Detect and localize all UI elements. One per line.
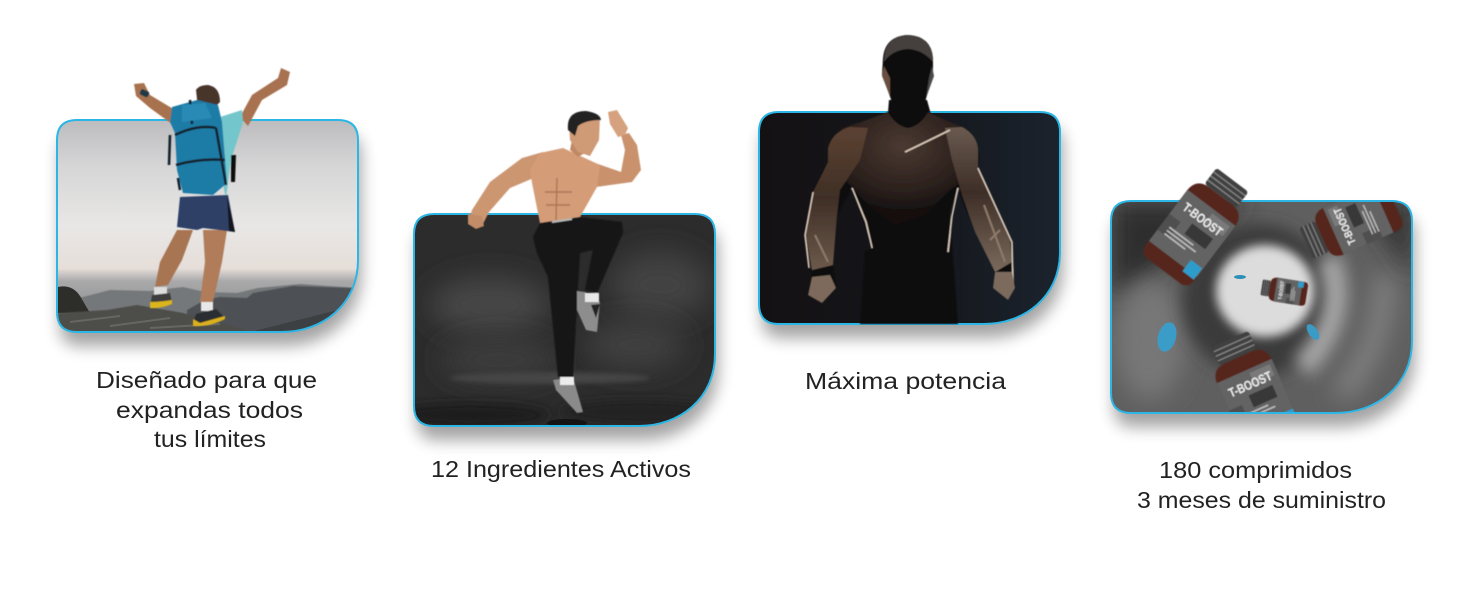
panel: hiker photo card	[57, 68, 361, 346]
card border	[414, 214, 715, 426]
card border	[1111, 201, 1412, 413]
caption: limits: Diseñado para que	[96, 367, 317, 393]
caption: limits: tus límites	[154, 426, 266, 452]
grey tunnel background	[1112, 202, 1411, 412]
caption: limits: expandas todos	[116, 397, 303, 423]
panel: muscular silhouette card	[759, 35, 1063, 338]
caption: potency: Máxima potencia	[805, 368, 1006, 394]
smoky dark background	[415, 215, 714, 425]
bottle: top right	[1300, 202, 1403, 258]
pill: tiny	[1234, 275, 1246, 279]
pill: small	[1304, 322, 1322, 342]
card border	[759, 112, 1060, 324]
hiker figure	[134, 68, 290, 326]
athlete figure	[468, 110, 641, 413]
caption: supply	[1137, 457, 1386, 513]
panel: athlete photo card	[390, 110, 720, 440]
caption: supply: 3 meses de suministro	[1137, 487, 1386, 513]
mountain landscape background	[57, 120, 358, 333]
bottle: top left	[1140, 162, 1256, 289]
bottle: small centre	[1260, 275, 1309, 306]
panel: floating bottles card	[1111, 162, 1415, 455]
caption: supply: 180 comprimidos	[1159, 457, 1352, 483]
bottle: bottom	[1213, 331, 1295, 412]
silhouette figure	[805, 35, 1015, 324]
card border	[57, 120, 358, 332]
pill: large	[1154, 320, 1180, 354]
dark background	[759, 112, 1060, 325]
caption: limits	[96, 367, 317, 452]
caption: ingredients: 12 Ingredientes Activos	[431, 456, 691, 482]
